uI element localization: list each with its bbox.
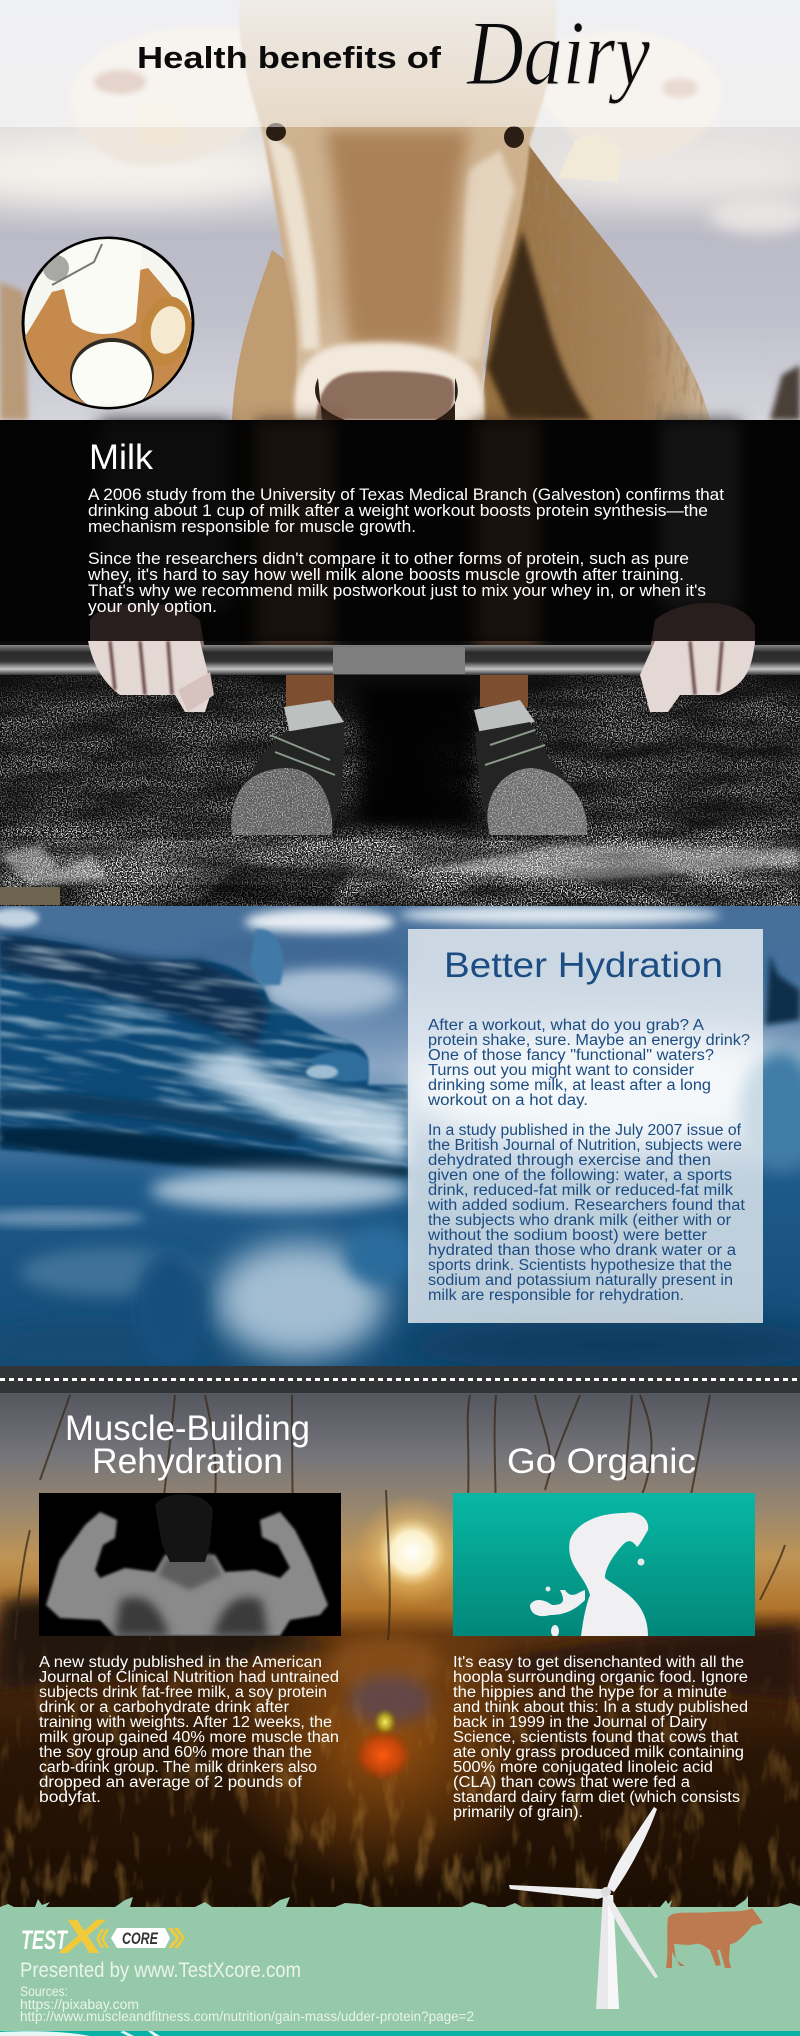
text block: muscle-building study: drink or a carbohydrate drink after (39, 1699, 289, 1716)
text block: milk study (87, 485, 724, 616)
heading: Milk: Milk (89, 438, 154, 477)
text block: go organic study: Science, scientists found that cows that (453, 1729, 739, 1746)
text block: hydration study: workout on a hot day. (427, 1092, 588, 1109)
text block: go organic study: (CLA) than cows that were fed a (453, 1774, 690, 1791)
text block: hydration study (427, 1017, 750, 1304)
text block: milk study: A 2006 study from the University of Texas Medical Branch (Galveston) confirms that (88, 485, 724, 504)
band: translucent title backdrop (0, 0, 800, 127)
text block: milk study: Since the researchers didn't compare it to other forms of protein, such as pure (88, 549, 689, 568)
band: dark overlay behind milk text (0, 420, 800, 641)
text block: milk study: drinking about 1 cup of milk after a weight workout boosts protein synthesis—the (88, 501, 708, 520)
heading: go organic: Go Organic (507, 1442, 696, 1481)
text block: hydration study: the British Journal of Nutrition, subjects were (428, 1137, 742, 1154)
text block: muscle-building study: carb-drink group. The milk drinkers also (39, 1759, 317, 1776)
text block: go organic study: 500% more conjugated linoleic acid (453, 1759, 713, 1776)
title: Health benefits of (137, 40, 442, 75)
text block: hydration study: drink, reduced-fat milk or reduced-fat milk (428, 1182, 733, 1199)
heading: muscle-building rehydration: Rehydration (92, 1442, 283, 1481)
title (137, 2, 650, 104)
panel: green footer (0, 1896, 800, 2031)
text block: hydration study: After a workout, what do you grab? A (428, 1017, 705, 1034)
text block: hydration study: the subjects who drank milk (either with or (428, 1212, 731, 1229)
text block: hydration study: Turns out you might want to consider (428, 1062, 694, 1079)
text block: muscle-building study: A new study published in the American (39, 1654, 322, 1671)
text block: hydration study: milk are responsible for rehydration. (428, 1287, 684, 1304)
icon: wind turbine (509, 1807, 658, 2009)
text block: muscle-building study: milk group gained 40% more muscle than (39, 1729, 339, 1746)
text block: milk study: mechanism responsible for muscle growth. (88, 517, 416, 536)
icon: round milk and bread photo (20, 235, 198, 412)
photo: milk splash (453, 1493, 755, 1637)
text block: sources: http://www.muscleandfitness.com/nutrition/gain-mass/udder-protein?page=2 (20, 2009, 474, 2024)
text block: muscle-building study (39, 1654, 339, 1806)
text block: muscle-building study: training with weights. After 12 weeks, the (39, 1714, 332, 1731)
text block: go organic study: It's easy to get disenchanted with all the (453, 1654, 744, 1671)
text block: go organic study (453, 1654, 748, 1821)
divider band with dashed line (0, 1366, 800, 1393)
panel: hero cow photo (0, 0, 800, 420)
text block: milk study: That's why we recommend milk postworkout just to mix your whey in, or when it's (88, 581, 706, 600)
text block: muscle-building study: Journal of Clinical Nutrition had untrained (39, 1669, 339, 1686)
credit: presented by: Presented by www.TestXcore.com (20, 1959, 301, 1982)
logo: TestX Core: CORE (122, 1929, 158, 1948)
text block: go organic study: hoopla surrounding organic food. Ignore (453, 1669, 748, 1686)
text block: hydration study: drinking some milk, at least after a long (428, 1077, 711, 1094)
text block: hydration study: with added sodium. Researchers found that (427, 1197, 746, 1214)
text block: milk study: your only option. (88, 597, 217, 616)
text block: hydration study: sodium and potassium naturally present in (428, 1272, 733, 1289)
title: Dairy (465, 2, 650, 104)
logo: TestX Core: X (57, 1911, 107, 1964)
panel: sunset photo (0, 1393, 800, 1907)
panel: better hydration card (408, 929, 763, 1323)
text block: go organic study: and think about this: In a study published (453, 1699, 748, 1716)
text block: go organic study: back in 1999 in the Journal of Dairy (453, 1714, 707, 1731)
text block: go organic study: standard dairy farm diet (which consists (453, 1789, 740, 1806)
logo: TestX Core (21, 1911, 185, 1964)
text block: go organic study: the hippies and the hype for a minute (453, 1684, 727, 1701)
photo: flexing back (39, 1493, 341, 1636)
text block: hydration study: sports drink. Scientists hypothesize that the (428, 1257, 732, 1274)
text block: hydration study: hydrated than those who drank water or a (428, 1242, 736, 1259)
text block: hydration study: given one of the following: water, a sports (428, 1167, 732, 1184)
text block: muscle-building study: subjects drink fat-free milk, a soy protein (39, 1684, 327, 1701)
text block: sources: https://pixabay.com (20, 1997, 139, 2012)
icon: cow silhouette (666, 1908, 763, 1968)
text block: milk study: whey, it's hard to say how well milk alone boosts muscle growth after training. (87, 565, 684, 584)
text block: muscle-building study: the soy group and 60% more than the (39, 1744, 312, 1761)
heading: better hydration: Better Hydration (444, 946, 723, 985)
text block: sources: Sources: (20, 1984, 68, 1999)
text block: muscle-building study: dropped an average of 2 pounds of (39, 1774, 303, 1791)
text block: go organic study: primarily of grain). (453, 1804, 583, 1821)
text block: hydration study: dehydrated through exercise and then (428, 1152, 711, 1169)
text block: hydration study: One of those fancy "functional" waters? (428, 1047, 714, 1064)
logo: TestX Core: TEST (21, 1925, 69, 1955)
panel: milk barbell photo (0, 420, 800, 906)
text block: hydration study: without the sodium boost) were better (427, 1227, 707, 1244)
strip: teal footer edge (0, 2031, 800, 2036)
text block: sources (20, 1984, 474, 2024)
text block: go organic study: ate only grass produced milk containing (453, 1744, 744, 1761)
heading: muscle-building rehydration: Muscle-Building (65, 1409, 310, 1448)
heading: muscle-building rehydration (65, 1409, 310, 1481)
text block: hydration study: In a study published in the July 2007 issue of (428, 1122, 742, 1139)
text block: hydration study: protein shake, sure. Maybe an energy drink? (428, 1032, 750, 1049)
text block: muscle-building study: bodyfat. (39, 1789, 101, 1806)
panel: ocean wave photo (0, 869, 800, 1371)
